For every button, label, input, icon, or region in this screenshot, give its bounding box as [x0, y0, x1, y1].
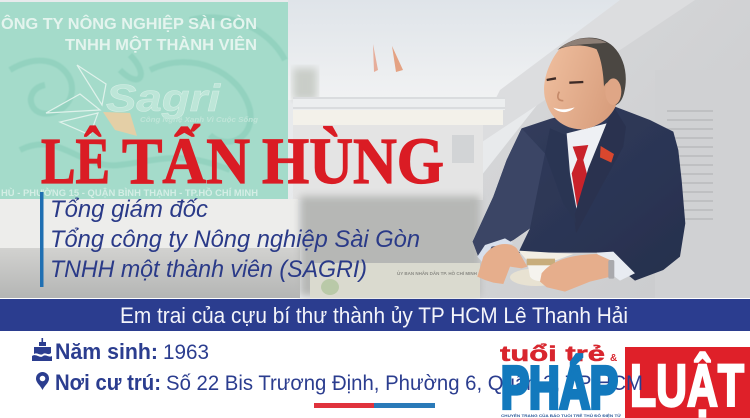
panel: green SAGRI sign: HÙ - PHƯỜNG 15 - QUẬN BÌNH THẠNH - TP.HỒ CHÍ MINH: [1, 187, 258, 198]
address: Số 22 Bis Trương Định, Phường 6, Quận 3, TP HCM: [166, 372, 643, 395]
saucer and cup: [510, 269, 562, 286]
sign text: company name: ÔNG TY NÔNG NGHIỆP SÀI GÒN: [1, 15, 257, 33]
birth year: 1963: [163, 341, 209, 364]
shirt cuffs: [477, 238, 513, 263]
watch: [608, 260, 614, 279]
logo: Tuoi Tre & Phap: CHUYÊN TRANG CỦA BÁO TUỔI TRẺ THỦ ĐÔ ĐIỆN TỬ: [501, 413, 622, 418]
head: [544, 38, 626, 129]
panel: green SAGRI sign: [0, 2, 288, 199]
shirt and tie: [567, 123, 607, 210]
job title: Tổng công ty Nông nghiệp Sài Gòn: [50, 226, 420, 253]
background: building photo: ỦY BAN NHÂN DÂN TP. HỒ CHÍ MINH: [397, 269, 477, 276]
birth year: Năm sinh:: [55, 339, 158, 364]
hands: [477, 244, 527, 284]
name heading: [41, 124, 444, 198]
name heading: TẤN: [122, 124, 250, 198]
icon: location pin: [36, 372, 49, 390]
name heading: HÙNG: [262, 125, 444, 198]
logo: Tuoi Tre & Phap: &: [610, 353, 617, 364]
photo: man in suit with coffee cup: [473, 38, 685, 292]
panel: green SAGRI sign: Công Nghệ Xanh Vì Cuộc Sống: [140, 116, 259, 124]
birth year: [55, 339, 209, 364]
address: Nơi cư trú:: [55, 370, 161, 395]
logo: Tuoi Tre & Phap: tuổi trẻ: [500, 343, 605, 366]
suit jacket: [473, 106, 685, 281]
banner: relation: [0, 299, 750, 331]
banner: relation: Em trai của cựu bí thư thành ủy TP HCM Lê Thanh Hải: [120, 303, 628, 328]
badge: [600, 146, 614, 163]
accent bar: [40, 192, 44, 287]
name heading: LÊ: [41, 125, 110, 198]
job title: [50, 196, 420, 283]
logo: Tuoi Tre & Phap: [500, 343, 622, 418]
panel: green SAGRI sign: TNHH MỘT THÀNH VIÊN: [65, 36, 257, 54]
panel: green SAGRI sign: Sagri: [106, 78, 222, 120]
job title: TNHH một thành viên (SAGRI): [50, 256, 367, 283]
background: building photo: [0, 0, 750, 298]
lapels: [574, 106, 626, 233]
icon: birthday cake: [32, 338, 52, 361]
sleeve highlights: [473, 128, 545, 257]
divider: red and blue: [314, 403, 435, 408]
job title: Tổng giám đốc: [50, 196, 208, 223]
